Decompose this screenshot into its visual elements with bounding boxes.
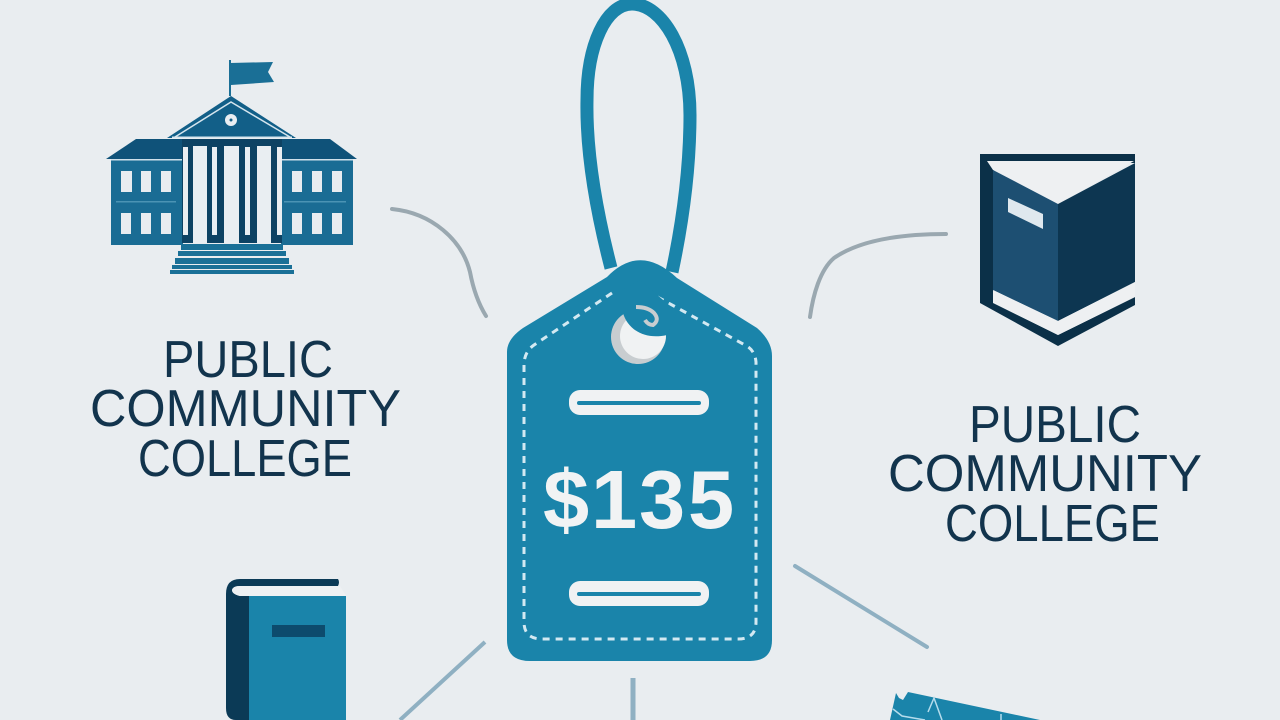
- label: right: COMMUNITY: [888, 445, 1202, 503]
- pediment with clock: [167, 96, 296, 138]
- label: left: COLLEGE: [138, 430, 352, 488]
- top bar: [569, 390, 709, 415]
- loop string: [587, 4, 690, 272]
- icon: map fragment: [890, 692, 1040, 720]
- flag: [229, 60, 274, 96]
- connector: bottom right: [795, 566, 927, 647]
- cover label: [1008, 198, 1043, 229]
- connector: top right: [810, 234, 946, 317]
- connector: bottom left: [400, 642, 485, 720]
- label: right: COLLEGE: [945, 495, 1160, 553]
- icon: open book, dark: [980, 154, 1135, 346]
- pages: [987, 161, 1134, 204]
- connector: bottom centre: [630, 678, 636, 720]
- right cover: [1058, 163, 1135, 321]
- label: right: [888, 396, 1202, 553]
- bottom bar: [569, 581, 709, 606]
- price tag: [507, 260, 772, 661]
- label: right: PUBLIC: [969, 396, 1141, 454]
- spine and back cover: [980, 154, 1135, 346]
- icon: closed book: [226, 579, 346, 720]
- connector: top left: [392, 209, 486, 316]
- windows: [121, 171, 342, 234]
- label: left: COMMUNITY: [90, 380, 401, 438]
- wings: [106, 139, 357, 245]
- stitching: [524, 283, 756, 639]
- label: left: PUBLIC: [163, 331, 333, 389]
- steps: [170, 244, 294, 274]
- tag body: [507, 260, 772, 661]
- left cover: [993, 170, 1058, 321]
- eyelet: [611, 280, 677, 364]
- portico and columns: [182, 139, 282, 243]
- price: $135: [543, 453, 734, 546]
- bottom pages: [993, 282, 1135, 335]
- icon: college building: [106, 60, 357, 274]
- label: left: [90, 331, 401, 488]
